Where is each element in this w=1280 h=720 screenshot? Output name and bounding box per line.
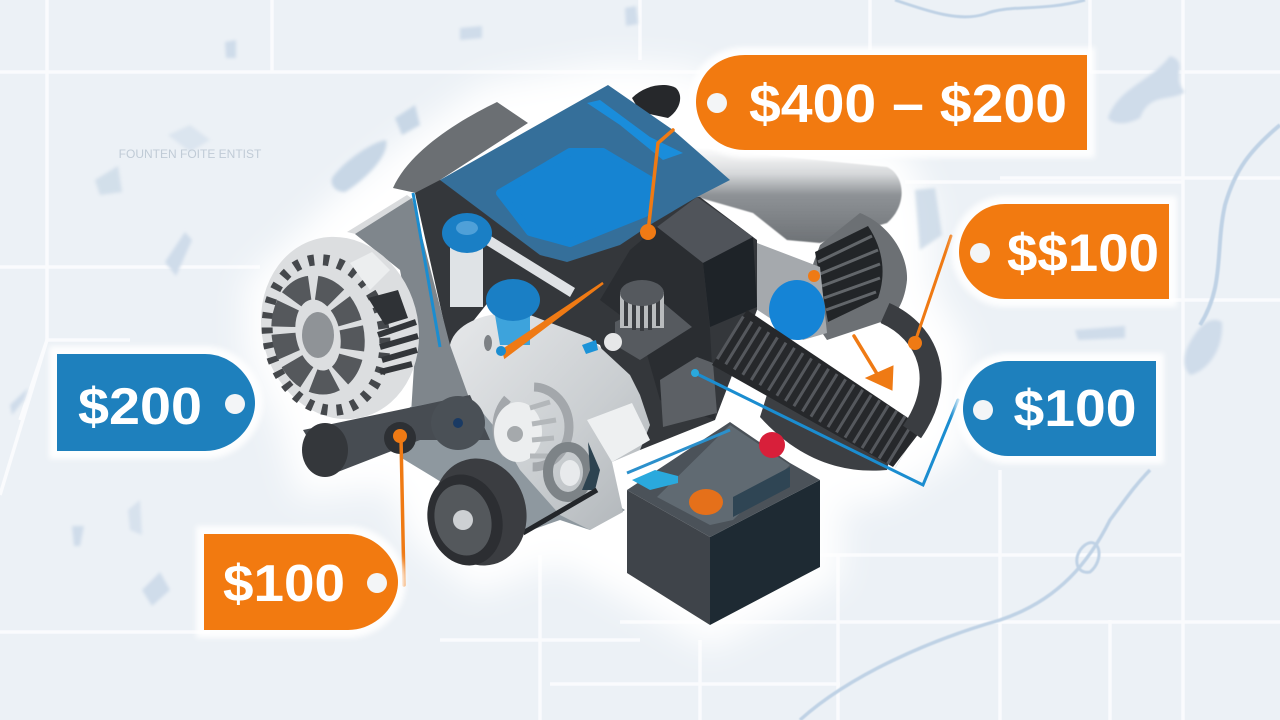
dark main block (415, 180, 757, 450)
price tag: $$100: $$100 (1007, 224, 1159, 283)
faint map details over halo (95, 105, 942, 250)
arched grey hood (393, 102, 528, 196)
silver housing (450, 313, 650, 530)
engine halo (262, 80, 950, 630)
small belt ring (523, 442, 600, 533)
curved hose (885, 313, 931, 432)
lower grey body (400, 397, 625, 533)
dark right block beside housing (660, 357, 717, 427)
faint map label: FOUNTEN FOITE ENTIST (119, 147, 262, 161)
connector lines (393, 130, 958, 585)
alternator (241, 219, 439, 437)
right fan housing (753, 213, 907, 340)
blue disc (769, 280, 825, 340)
price tag: $100 right blue: $100 (1014, 380, 1136, 438)
reservoirs with blue caps (442, 213, 540, 351)
centre gear (494, 387, 569, 467)
blue top cover (440, 85, 730, 262)
white strip (483, 233, 575, 297)
grey upper right cylinder (687, 147, 902, 243)
grey bracket (347, 195, 414, 235)
price tag: $400 - $200: $400 – $200 (749, 74, 1067, 134)
corrugated hose (712, 310, 923, 471)
price tag: $100 right blue (963, 361, 1156, 456)
engine illustration (241, 85, 931, 625)
price tag: $100 lower left (204, 534, 398, 630)
left tube and collar (302, 395, 490, 477)
black cap (632, 85, 680, 118)
price tag: $100 lower left: $100 (223, 555, 345, 613)
price tag: $200 left blue (57, 354, 255, 451)
price tag: $200 left blue: $200 (78, 378, 202, 436)
battery (627, 422, 820, 625)
price tag: $$100 (959, 204, 1169, 299)
ribbed knob (582, 280, 692, 360)
square plate (753, 243, 827, 340)
lower pulley (417, 448, 538, 576)
price tag: $400 - $200 (696, 55, 1087, 150)
